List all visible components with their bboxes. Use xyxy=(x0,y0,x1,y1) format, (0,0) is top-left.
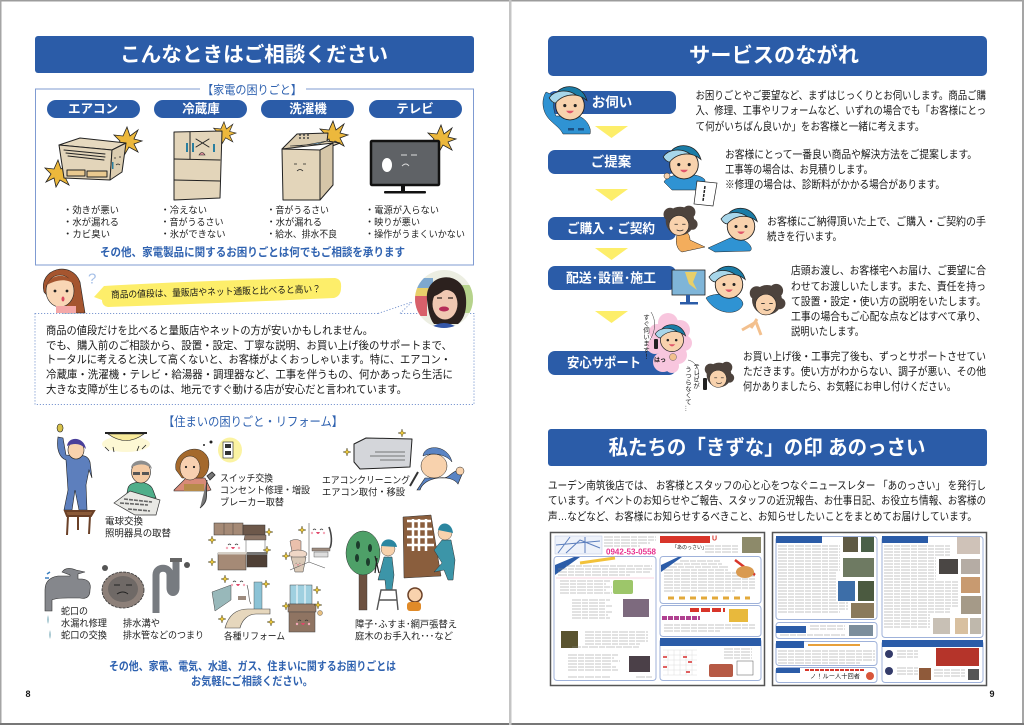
label: エアコンクリーニング xyxy=(322,474,410,498)
panel: 値段の説明: 大きな支障が生じるものは、地元ですぐ動ける店が安心だと言われています。 xyxy=(46,382,407,396)
panel: 家電の困りごと xyxy=(36,82,474,265)
symptoms: ・映りが悪い xyxy=(365,216,420,228)
label: 障子・ふすま: 障子･ふすま･網戸張替え xyxy=(355,618,457,630)
step 3: ご購入・ご契約 xyxy=(548,206,757,252)
page number 8: 8 xyxy=(25,689,31,699)
step 5 description: 何かありましたら、お気軽にお申し付けください。 xyxy=(743,379,956,393)
symptoms: ・音がうるさい xyxy=(160,216,224,228)
quiz panel: ノ！ルー人十回者 xyxy=(810,672,860,680)
step 1: お伺い: お伺い xyxy=(592,95,632,110)
icon: worker with estimate xyxy=(663,146,717,206)
symptoms: ・給水、排水不良 xyxy=(266,228,337,240)
category: 洗濯機: 洗濯機 xyxy=(289,101,327,116)
symptoms: ・効きが悪い xyxy=(63,204,119,216)
step 2: ご提案 xyxy=(548,146,717,206)
diary panel xyxy=(776,536,877,620)
masthead: U xyxy=(712,536,717,542)
step 4: 配送・設置・施工 xyxy=(548,266,785,335)
label: 蛇口 xyxy=(61,606,107,642)
heading: 私たちの「きずな」の印 あのっさい xyxy=(548,429,987,466)
icon: worker with monitor and customer xyxy=(672,266,785,335)
label: 障子・ふすま xyxy=(355,618,457,642)
newsletter: back page xyxy=(772,532,986,686)
label: 電球交換: 照明器具の取替 xyxy=(105,528,171,540)
symptoms: ・操作がうまくいかない xyxy=(365,228,465,240)
symptoms xyxy=(63,204,119,240)
symptoms: ・冷えない xyxy=(160,204,207,216)
step 3 description: 続きを行います。 xyxy=(767,229,842,243)
step 4: 配送・設置・施工: 配送･設置･施工 xyxy=(566,270,656,286)
icon: phone support: すぐ伺います！ xyxy=(642,314,650,360)
newsletter: front page xyxy=(550,532,764,686)
event panel xyxy=(660,606,761,636)
label: スイッチ交換: スイッチ交換 xyxy=(220,472,273,484)
column panel xyxy=(660,556,761,604)
illustration: toilet xyxy=(282,523,331,572)
illustration: leaking faucet xyxy=(45,568,90,639)
panel: 値段の説明: 冷蔵庫・洗濯機・テレビ・給湯器・調理器など、工事を伴うもの、何かあったら生活に xyxy=(46,367,453,381)
step 3: ご購入・ご契約: ご購入・ご契約 xyxy=(567,221,655,236)
quiz panel xyxy=(776,668,877,682)
icon: phone support: うつらなくて… xyxy=(684,366,692,412)
icon: woman with question: ? xyxy=(88,270,96,288)
symptoms: ・電源が入らない xyxy=(365,204,439,216)
label: 蛇口: 蛇口の xyxy=(61,606,88,618)
symptoms: ・音がうるさい xyxy=(266,204,329,216)
heading: こんなときはご相談ください xyxy=(35,36,474,73)
illustration: clogged drain and pipe xyxy=(102,558,190,613)
symptoms: ・水が漏れる xyxy=(63,216,119,228)
step 2 description: 工事等の場合は、お見積りします。 xyxy=(725,162,873,176)
symptoms: ・水が漏れる xyxy=(266,216,322,228)
panel heading: 【家電の困りごと】 xyxy=(202,82,302,97)
page number 9: 9 xyxy=(989,689,995,699)
label: 排水溝: 排水管などのつまり xyxy=(123,630,204,642)
step 2 description xyxy=(725,147,977,191)
step 4 description: わせてお渡しいたします。また、責任を持っ xyxy=(791,279,986,293)
illustration: child xyxy=(407,588,422,611)
step 3 description xyxy=(767,214,986,243)
arrow 3 xyxy=(595,248,628,260)
icon: phone support: テレビが xyxy=(692,363,700,389)
label: 排水溝: 排水溝や xyxy=(123,618,160,630)
symptoms xyxy=(160,204,226,240)
category: エアコン xyxy=(45,100,142,240)
illustration: bathroom xyxy=(212,575,275,628)
panel: 値段の説明: 商品の値段だけを比べると量販店やネットの方が安いかもしれません。 xyxy=(46,323,373,337)
step 4 description: 工事の場合もご心配な点などはすべて承り、 xyxy=(791,309,986,323)
step 1 description: て何がいちばん良いか」をお客様と一緒に考えます。 xyxy=(696,119,924,133)
step 5: 安心サポート: 安心サポート xyxy=(567,356,641,370)
heading: サービスのながれ xyxy=(548,36,987,76)
illustration: ceiling lamp and reading man xyxy=(102,432,160,515)
step 5: 安心サポート xyxy=(548,312,734,412)
arrow 4 xyxy=(595,311,628,323)
speech bubble: 値段の質問 xyxy=(94,278,341,307)
calendar panel xyxy=(660,638,761,680)
icon: woman with question xyxy=(43,269,96,313)
step 5 description: お買い上げ後・工事完了後も、ずっとサポートさせてい xyxy=(743,349,986,363)
panel: 値段の説明 xyxy=(35,302,474,404)
masthead xyxy=(660,536,761,553)
category: 冷蔵庫 xyxy=(154,100,247,240)
category: エアコン: エアコン xyxy=(68,102,118,116)
symptoms xyxy=(266,204,337,240)
callout: 住まいのご相談 xyxy=(109,659,396,688)
speech bubble: 値段の質問: 商品の値段は、量販店やネット通販と比べると高い？ xyxy=(111,283,321,301)
panel: 値段の説明: トータルに考えると決して高くないと、お客様がよくおっしゃいます。特に、エアコン・ xyxy=(46,352,451,366)
symptoms: ・カビ臭い xyxy=(63,228,110,240)
staff panel xyxy=(776,622,877,638)
label: スイッチ交換 xyxy=(220,472,310,508)
label: エアコンクリーニング: エアコン取付・移設 xyxy=(322,486,405,498)
step 2 description: ※修理の場合は、診断料がかかる場合があります。 xyxy=(725,177,945,191)
label: 排水溝 xyxy=(123,618,204,642)
callout: 住まいのご相談: お気軽にご相談ください。 xyxy=(191,674,313,688)
category: 冷蔵庫: 冷蔵庫 xyxy=(182,101,220,116)
step 5 description: ただきます。使い方がわからない、調子が悪い、その他 xyxy=(743,364,986,378)
story panel xyxy=(776,641,877,666)
illustration: woman with outlet trouble xyxy=(174,438,242,508)
photo: staff portrait xyxy=(415,270,473,330)
illustration: kitchen xyxy=(208,523,273,570)
label: 各種リフォーム: 各種リフォーム xyxy=(224,630,285,642)
callout: 住まいのご相談: その他、家電、電気、水道、ガス、住まいに関するお困りごとは xyxy=(109,659,396,673)
illustration: worker changing bulb xyxy=(57,424,94,535)
label: スイッチ交換: コンセント修理・増設 xyxy=(220,484,310,496)
label: エアコンクリーニング: エアコンクリーニング xyxy=(322,474,410,486)
staff introduction panel xyxy=(882,640,983,682)
category: テレビ: テレビ xyxy=(396,101,434,116)
arrow 1 xyxy=(595,126,628,138)
heading: 私たちの「きずな」の印 あのっさい: 私たちの「きずな」の印 あのっさい xyxy=(608,436,926,460)
step 3 description: お客様にご納得頂いた上で、ご購入・ご契約の手 xyxy=(767,214,986,228)
masthead: 「あのっさい」 xyxy=(672,544,707,551)
article panel xyxy=(554,556,656,680)
label: 蛇口: 水漏れ修理 xyxy=(61,618,107,630)
map xyxy=(555,536,602,554)
phone number: 0942-53-0558 xyxy=(606,548,657,556)
symptoms: ・氷ができない xyxy=(160,228,226,240)
label: 蛇口: 蛇口の交換 xyxy=(61,630,107,642)
illustration: door and repair worker xyxy=(403,515,455,580)
panel: 値段の説明: でも、購入前のご相談から、設置・設定、丁寧な説明、お買い上げ後のサポートまで、 xyxy=(46,338,452,352)
label: 障子・ふすま: 庭木のお手入れ･･･など xyxy=(355,630,453,642)
icon: broken air conditioner xyxy=(45,127,142,187)
category: テレビ xyxy=(365,100,465,240)
illustration: tree and gardener xyxy=(346,531,398,610)
heading: 住まいの困りごと・リフォーム: 【住まいの困りごと・リフォーム】 xyxy=(163,414,343,429)
icon: broken refrigerator xyxy=(174,122,236,200)
step 4 description: 説明いたします。 xyxy=(791,324,864,338)
step 1 description xyxy=(696,88,986,133)
callout: 家電のご相談: その他、家電製品に関するお困りごとは何でもご相談を承ります xyxy=(100,245,405,259)
step 2: ご提案: ご提案 xyxy=(591,154,632,170)
icon: broken television xyxy=(371,125,456,194)
icon: handshake xyxy=(664,206,757,252)
icon: broken washing machine xyxy=(282,121,348,200)
step 5 description xyxy=(743,349,986,393)
step 4 description: て設置・設定・使い方の説明をいたします。 xyxy=(791,294,986,308)
step 4 description xyxy=(791,263,986,338)
icon: phone support xyxy=(642,312,734,412)
illustration: vanity xyxy=(282,585,322,632)
step 2 description: お客様にとって一番良い商品や解決方法をご提案します。 xyxy=(725,147,977,161)
arrow 2 xyxy=(595,189,628,201)
step 1: お伺い xyxy=(543,87,676,134)
step 4 description: 店頭お渡し、お客様宅へお届け、ご要望に合 xyxy=(791,263,986,277)
label: 電球交換: 電球交換 xyxy=(105,516,143,528)
icon: phone support: はっ xyxy=(654,357,666,364)
intro text: ニュースレター xyxy=(548,478,986,523)
illustration: air conditioner cleaning xyxy=(343,429,464,490)
label: スイッチ交換: ブレーカー取替 xyxy=(220,496,284,508)
category: 洗濯機 xyxy=(261,100,354,240)
symptoms xyxy=(365,204,465,240)
heading: こんなときはご相談ください: こんなときはご相談ください xyxy=(120,42,388,66)
heading: サービスのながれ: サービスのながれ xyxy=(689,44,859,68)
reform panel xyxy=(882,536,983,638)
label: 電球交換 xyxy=(105,516,171,540)
icon: saluting worker xyxy=(543,87,590,134)
